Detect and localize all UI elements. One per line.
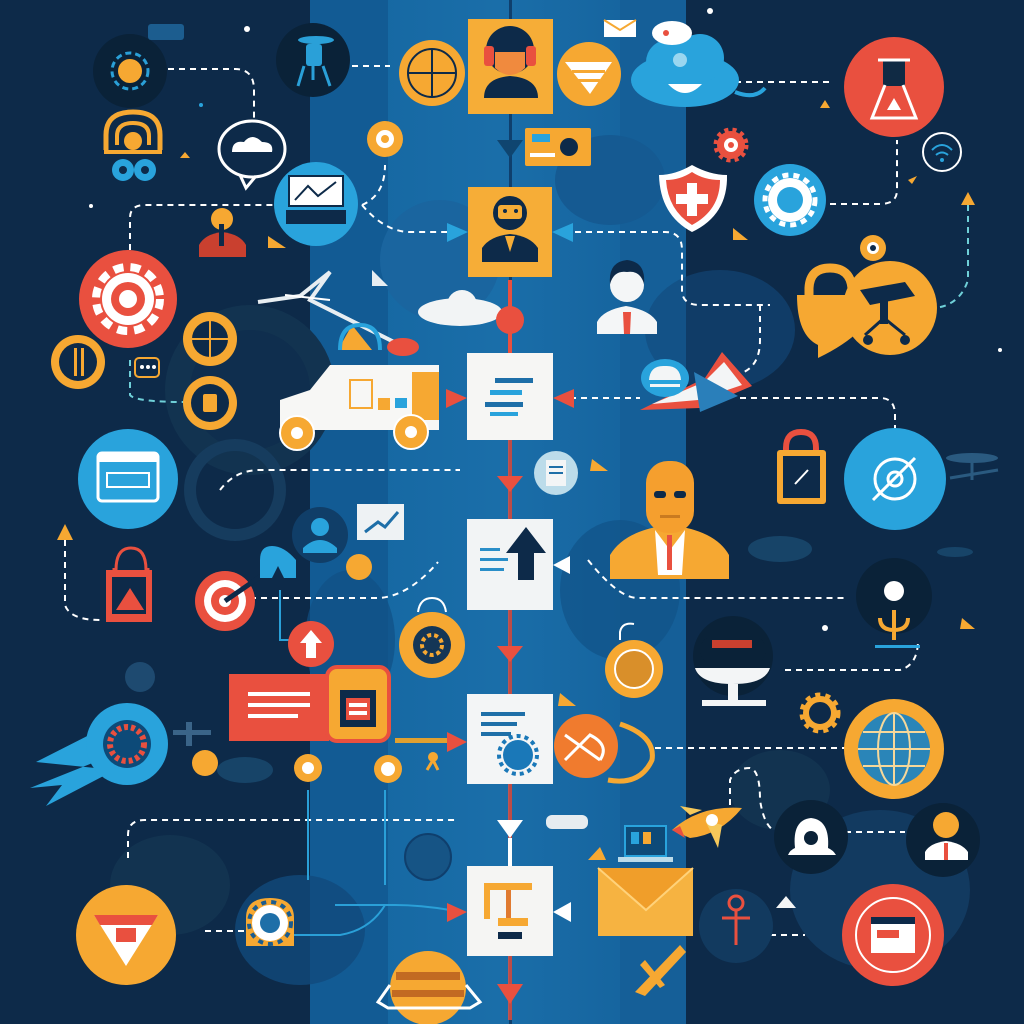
icon: small connector <box>173 722 211 746</box>
icon: blue target circle <box>844 428 946 530</box>
icon: red gear circle <box>79 250 177 348</box>
icon: chat chip <box>135 358 159 377</box>
icon: red tag circle <box>288 621 334 667</box>
icon: envelope small <box>604 20 636 37</box>
icon: fan coin <box>294 754 322 782</box>
icon: globe small <box>183 312 237 366</box>
icon: blue gear circle <box>754 164 826 236</box>
icon: dim table <box>946 453 998 480</box>
icon: hourglass circle <box>844 37 944 137</box>
box: top orange avatar <box>468 19 553 114</box>
icon: wifi arch <box>104 112 162 181</box>
icon: wifi circle <box>923 133 961 171</box>
icon: blue cloud <box>631 34 765 107</box>
icon: dim cloud <box>217 757 273 783</box>
central timeline <box>497 0 523 1024</box>
icon: red padlock picture <box>106 548 152 622</box>
crane and plane <box>258 270 419 356</box>
icon: person in shirt <box>597 260 657 334</box>
icon: orange swirl circle <box>554 714 652 781</box>
red node <box>496 306 524 334</box>
box: white chart document <box>446 353 574 440</box>
icon: orange dot <box>192 750 218 776</box>
icon: pencil <box>635 945 686 996</box>
dim pill <box>937 547 973 557</box>
box: white flowchart <box>447 866 571 956</box>
icon: orange tablet <box>327 667 389 741</box>
icon: golden envelope <box>598 868 693 936</box>
icon: pill <box>546 815 588 829</box>
icon: speech bubble <box>652 21 692 45</box>
icon: orange dot <box>346 554 372 580</box>
icon: target circle <box>399 40 465 106</box>
lower left icons <box>30 598 588 1024</box>
icon: user cloud <box>774 800 848 874</box>
icon: red shield <box>659 165 727 232</box>
icon: rocket basket circle <box>30 703 168 806</box>
icon: figure circle <box>699 889 773 963</box>
icon: red document circle <box>842 884 944 986</box>
small triangles and sparkles <box>89 8 1002 908</box>
icon: dim wheel <box>405 834 451 880</box>
icon: line chart card <box>357 504 404 540</box>
center right icons <box>534 260 752 996</box>
icon: blue pill <box>148 24 184 40</box>
icon: camera card <box>525 128 591 166</box>
icon: tools circle <box>51 335 105 389</box>
icon: presenter figure <box>199 208 246 257</box>
icon: blue figures <box>260 546 296 578</box>
dim dot <box>125 662 155 692</box>
icon: gear badge <box>246 898 294 946</box>
right column icons <box>659 37 998 986</box>
icon: orange triangle circle <box>76 885 176 985</box>
icon: drone figure <box>276 23 350 97</box>
center-left vehicle illustration <box>258 270 524 450</box>
icon: orange barrel <box>378 951 480 1024</box>
icon: rocket <box>672 806 742 848</box>
box: white arrow document <box>467 519 570 610</box>
icon: man portrait <box>906 803 980 877</box>
box: white report with gear <box>395 694 553 784</box>
icon: red slide panel <box>229 674 329 741</box>
icon: lock and scene <box>797 261 937 358</box>
icon: user badge <box>292 507 348 563</box>
icon: orange padlock <box>777 432 826 504</box>
icon: funnel circle <box>557 42 621 106</box>
icon: browser circle <box>78 429 178 529</box>
white cloud <box>418 290 502 326</box>
icon: clock coin <box>605 624 663 698</box>
icon: target with dart <box>195 570 270 631</box>
connector arrows beside second box <box>447 223 573 242</box>
icon: small badge <box>367 121 403 157</box>
icon: lock coin <box>183 376 237 430</box>
icon: red small gear <box>716 130 746 160</box>
icon: speech cloud <box>219 121 285 188</box>
icon: small figure <box>427 752 438 770</box>
icon: eye coin <box>860 235 886 261</box>
icon: plane with windows <box>640 352 752 412</box>
top row icons <box>93 20 765 166</box>
icon: laptop chart <box>618 826 673 862</box>
icon: laptop chart circle <box>274 162 358 246</box>
icon: pin plant <box>856 558 932 648</box>
icon: globe circle <box>844 699 944 799</box>
left upper icons <box>51 112 404 631</box>
icon: document ball <box>534 451 578 495</box>
icon: monitor <box>693 616 773 706</box>
icon: orange man <box>610 461 729 579</box>
icon: dashed ring sun <box>93 34 167 108</box>
dashed connectors <box>57 66 975 935</box>
icon: arrow coin <box>374 755 402 783</box>
icon: dim clouds <box>748 536 812 562</box>
icon: orange gear <box>802 695 838 731</box>
icon: padlock coin <box>399 598 465 678</box>
white van <box>280 365 439 450</box>
box: second orange avatar <box>468 187 552 277</box>
